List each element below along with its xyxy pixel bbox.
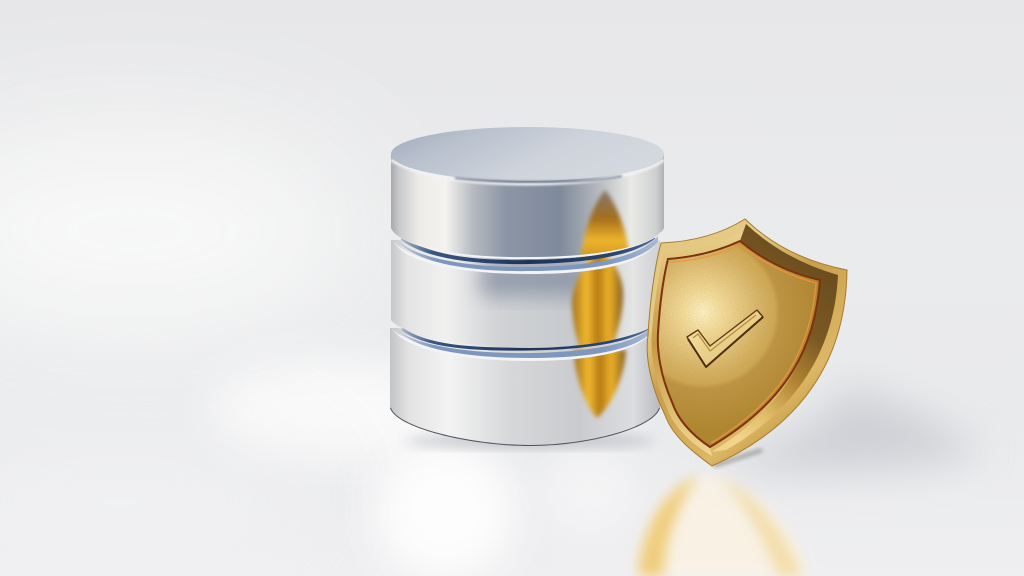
shield contact shadow [714, 450, 762, 466]
shield top-right dark bevel [711, 224, 838, 452]
shield outer rim [647, 219, 847, 466]
top disc [391, 127, 664, 262]
shadow under shield [725, 385, 985, 472]
database stack [390, 127, 664, 446]
shield [647, 219, 847, 466]
top face [391, 127, 664, 181]
floor reflections [375, 440, 808, 576]
shield face [658, 241, 820, 447]
illustration: database with gold shield [10, 127, 986, 576]
shield left bevel [652, 232, 742, 456]
middle disc [391, 236, 660, 352]
check mark [687, 310, 763, 367]
bottom disc [390, 327, 660, 446]
shadow under database [405, 434, 655, 448]
